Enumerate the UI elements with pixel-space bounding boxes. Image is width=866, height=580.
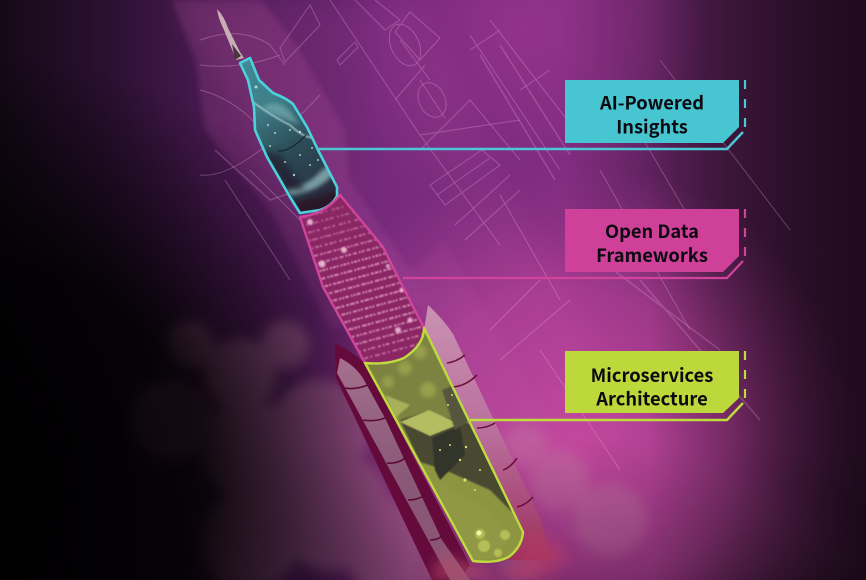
connector line: Microservices Architecture <box>470 403 743 420</box>
label box <box>565 80 739 143</box>
dashes <box>744 80 746 127</box>
callout: Open Data Frameworks <box>403 209 745 278</box>
label text: Open Data <box>605 218 699 244</box>
right booster <box>424 305 552 560</box>
bottle texture <box>254 86 336 212</box>
label text: Insights <box>616 114 688 140</box>
rocket stage: open data section <box>298 194 426 364</box>
scrolling data rows <box>302 206 422 360</box>
clouds <box>130 321 646 580</box>
circuit board texture <box>365 328 520 560</box>
callout: Microservices Architecture <box>470 351 745 420</box>
label text: AI-Powered <box>599 90 704 116</box>
label box <box>565 351 739 413</box>
label box <box>565 209 739 272</box>
dashes <box>744 351 746 398</box>
rocket stage: AI-powered bottle <box>240 58 345 215</box>
exhaust flames <box>430 528 570 580</box>
rocket stage: microservices section <box>365 328 523 562</box>
label text: Architecture <box>595 386 708 412</box>
callout: AI-Powered Insights <box>318 80 745 149</box>
dashes <box>744 209 746 256</box>
connector line: Open Data Frameworks <box>403 261 743 278</box>
blueprint line highlights <box>215 45 760 420</box>
connector line: AI-Powered Insights <box>318 132 743 149</box>
label text: Microservices <box>591 362 713 388</box>
rocket stage: small tip <box>217 9 244 60</box>
ghost rocket silhouette <box>172 0 620 540</box>
left booster <box>335 343 470 580</box>
label text: Frameworks <box>596 242 708 268</box>
blueprint line drawing <box>200 0 790 470</box>
